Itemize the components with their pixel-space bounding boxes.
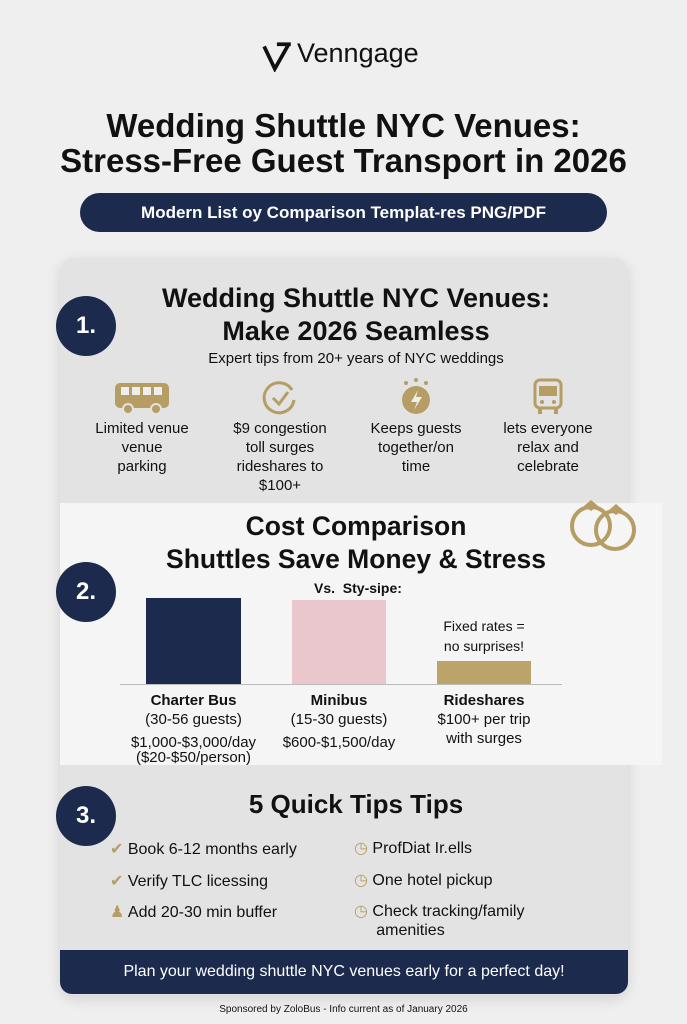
section 1 subheading: Expert tips from 20+ years of NYC weddings: [208, 350, 504, 367]
panel: section 1: [56, 283, 550, 367]
number 2: 2.: [76, 578, 96, 605]
label: charter bus: Charter Bus: [151, 692, 236, 709]
text: limited parking: [95, 420, 189, 475]
number 2: [56, 562, 116, 622]
text: keeps guests: together/on: [378, 439, 454, 456]
callout: fixed rates: Fixed rates =: [443, 618, 525, 634]
icon: rings: [570, 500, 636, 551]
title: Wedding Shuttle NYC Venues:: [106, 107, 581, 144]
panel: section 3 tips: [56, 786, 463, 846]
tip: tracking: [354, 903, 524, 939]
tip: hotel pickup: ◷ One hotel pickup: [354, 872, 492, 889]
callout: fixed rates: [443, 618, 525, 654]
subtitle pill: [80, 193, 607, 232]
section 3 heading: 5 Quick Tips Tips: [249, 789, 463, 819]
section 2 heading: [166, 511, 546, 574]
label: rideshares: with surges: [446, 730, 522, 747]
callout: fixed rates: no surprises!: [444, 638, 524, 654]
title: Stress-Free Guest Transport in 2026: [60, 142, 627, 179]
tip: buffer: ♟︎ Add 20-30 min buffer: [110, 904, 277, 921]
text: keeps guests: time: [402, 458, 430, 475]
text: limited parking: Limited venue: [95, 420, 189, 437]
icon: bus: [115, 383, 169, 413]
tip: profdiat: ◷ ProfDiat Ir.ells: [354, 840, 472, 857]
sponsor note: Sponsored by ZoloBus - Info current as of January 2026: [219, 1004, 468, 1015]
icon: check: [262, 381, 296, 414]
section 1 heading: Make 2026 Seamless: [222, 316, 490, 346]
label: charter bus: $1,000-$3,000/day: [131, 734, 256, 751]
chart subtitle: Vs. Sty-sipe:: [314, 580, 402, 596]
label: minibus: Minibus: [311, 692, 367, 709]
number 3: 3.: [76, 802, 96, 829]
section 1 heading: [162, 283, 550, 346]
subtitle pill: Modern List oy Comparison Templat-res PNG/PDF: [141, 203, 546, 222]
label: rideshares: [438, 692, 530, 747]
number 3: [56, 786, 116, 846]
text: congestion toll: $9 congestion: [233, 420, 327, 437]
main card: [60, 258, 628, 995]
text: limited parking: parking: [117, 458, 167, 475]
logo: Venngage: [297, 38, 419, 68]
panel: section 2 cost comparison: [56, 511, 546, 622]
footer banner: Plan your wedding shuttle NYC venues early for a perfect day!: [123, 963, 565, 980]
icon: bolt: [402, 378, 430, 414]
section 2 heading: Shuttles Save Money & Stress: [166, 544, 546, 574]
tip: tracking: amenities: [376, 922, 445, 939]
label: rideshares: Rideshares: [444, 692, 524, 709]
tip: book early: ✔︎ Book 6-12 months early: [110, 841, 297, 858]
text: relax: lets everyone: [503, 420, 593, 437]
text: congestion toll: [233, 420, 327, 494]
title: [60, 107, 627, 179]
text: congestion toll: rideshares to: [237, 458, 323, 475]
logo: [262, 38, 419, 72]
label: charter bus: [131, 692, 256, 766]
number 1: [56, 296, 116, 356]
tips list: [110, 840, 524, 939]
tip: verify TLC: ✔︎ Verify TLC licessing: [110, 873, 268, 890]
label: charter bus: (30-56 guests): [145, 711, 242, 728]
text: congestion toll: $100+: [259, 477, 301, 494]
text: relax: [503, 420, 593, 475]
text: congestion toll: toll surges: [246, 439, 314, 456]
section 1 heading: Wedding Shuttle NYC Venues:: [162, 283, 550, 313]
section 2 heading: Cost Comparison: [246, 511, 466, 541]
text: limited parking: venue: [122, 439, 162, 456]
label: charter bus: ($20-$50/person): [136, 749, 251, 766]
label: minibus: $600-$1,500/day: [283, 734, 395, 751]
text: relax: relax and: [517, 439, 579, 456]
text: relax: celebrate: [517, 458, 579, 475]
tip: tracking: ◷ Check tracking/family: [354, 903, 524, 920]
footer banner: [60, 950, 628, 994]
number 1: 1.: [76, 312, 96, 339]
text: keeps guests: [371, 420, 461, 475]
label: minibus: [283, 692, 396, 751]
label: rideshares: $100+ per trip: [438, 711, 530, 728]
bar chart: [120, 598, 562, 766]
icon: coach: [534, 378, 562, 414]
text: keeps guests: Keeps guests: [371, 420, 461, 437]
label: minibus: (15-30 guests): [291, 711, 387, 728]
